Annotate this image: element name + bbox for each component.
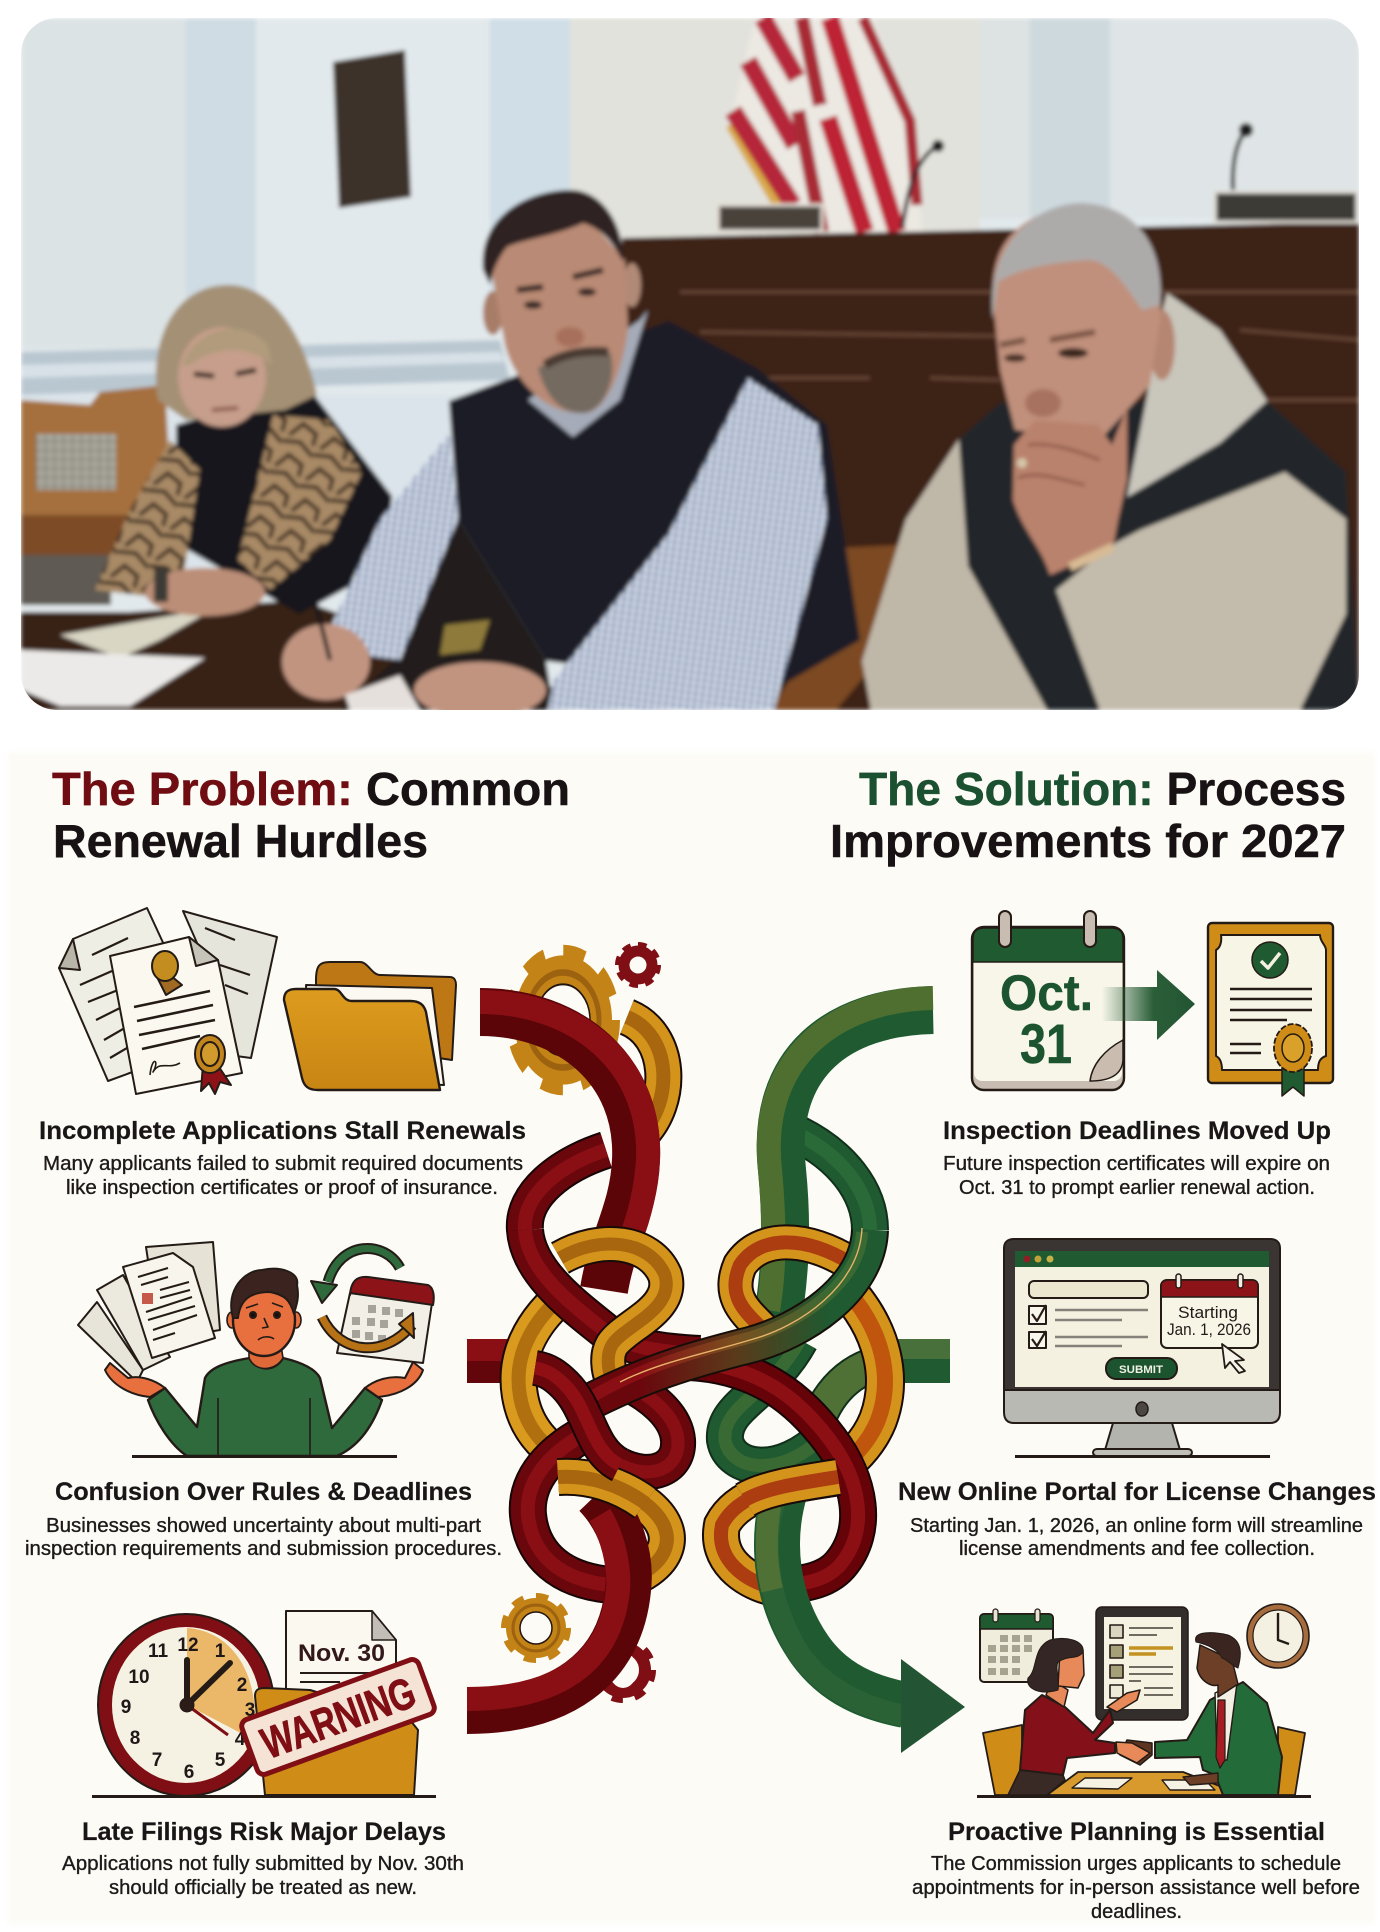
text: New Online Portal for License Changes: New Online Portal for License Changes: [898, 1478, 1376, 1506]
text: Inspection Deadlines Moved Up: Oct. 31 to prompt earlier renewal action.: [959, 1177, 1315, 1199]
icon: chairs: [983, 1725, 1305, 1795]
icon: clock: 3: [245, 1700, 255, 1721]
icon: calendar with arrows: [311, 1248, 434, 1363]
photo: chairs: [21, 385, 900, 710]
icon: clock: 5: [215, 1750, 226, 1771]
text: Proactive Planning is Essential: appointments for in-person assistance well before: [912, 1877, 1360, 1899]
photo: nameplates and microphones: [718, 123, 1357, 231]
text: Late Filings Risk Major Delays: should officially be treated as new.: [109, 1877, 417, 1899]
portal: submit button: [1106, 1358, 1177, 1379]
icon: clock: 10: [128, 1667, 150, 1688]
icon: clock: 12: [177, 1635, 199, 1656]
text: Incomplete Applications Stall Renewals: [39, 1117, 526, 1199]
icon: clock: 8: [130, 1728, 140, 1749]
photo: man on the right: [862, 203, 1359, 710]
icon: gears behind the knot: [505, 946, 657, 1699]
text: Proactive Planning is Essential: Proactive Planning is Essential: [948, 1818, 1325, 1846]
panel: problem 3, clock and warning icon: [92, 1611, 436, 1798]
text: Proactive Planning is Essential: deadlines.: [1091, 1901, 1182, 1923]
icon: clock: 4: [235, 1729, 246, 1750]
icon: man in green: [1155, 1633, 1282, 1795]
panel: solution 2, monitor with online portal: [1004, 1239, 1280, 1458]
text: Late Filings Risk Major Delays: [62, 1818, 464, 1899]
portal: cursor: [1222, 1344, 1245, 1373]
text: Late Filings Risk Major Delays: Late Filings Risk Major Delays: [82, 1818, 446, 1846]
icon: clock: 6: [184, 1762, 194, 1783]
title: The Solution: The Solution: Process: [859, 763, 1346, 815]
panel: solution 3, meeting and handshake icon: [977, 1604, 1311, 1798]
portal: Starting Jan. 1, 2026 card: Starting: [1178, 1303, 1238, 1322]
icon: Oct. 31 calendar: [972, 911, 1124, 1090]
text: Incomplete Applications Stall Renewals: Incomplete Applications Stall Renewals: [39, 1117, 526, 1145]
text: Confusion Over Rules and Deadlines: [25, 1478, 502, 1560]
icon: certificate: [110, 937, 242, 1094]
icon: Oct. 31 calendar: Oct.: [1000, 965, 1093, 1021]
icon: woman in red: [1008, 1638, 1140, 1795]
text: New Online Portal for License Changes: [898, 1478, 1376, 1560]
text: Confusion Over Rules and Deadlines: inspection requirements and submission procedures.: [25, 1538, 502, 1560]
photo: table with papers: [21, 600, 620, 710]
icon: tablet checklist: [1096, 1607, 1188, 1720]
icon: table: [1047, 1772, 1243, 1795]
icon: certificate with check: [1208, 923, 1333, 1096]
portal: Starting Jan. 1, 2026 card: Jan. 1, 2026: [1167, 1320, 1251, 1339]
icon: handshake: [1116, 1740, 1152, 1765]
photo: wall: [21, 18, 1360, 710]
icon: confused person: [105, 1269, 423, 1458]
icon: warning stamp: WARNING: [255, 1668, 422, 1769]
title: The Problem: [52, 763, 570, 867]
title: The Problem: The Problem: Common: [52, 763, 570, 815]
portal: submit button: SUBMIT: [1119, 1364, 1163, 1376]
icon: clock: 7: [152, 1750, 162, 1771]
text: New Online Portal for License Changes: license amendments and fee collection.: [959, 1538, 1315, 1560]
text: Inspection Deadlines Moved Up: Future inspection certificates will expire on: [943, 1153, 1330, 1175]
icon: Oct. 31 calendar: 31: [1020, 1012, 1072, 1075]
text: Incomplete Applications Stall Renewals: Many applicants failed to submit required documents: [43, 1153, 523, 1175]
portal: Starting Jan. 1, 2026 card: [1161, 1274, 1258, 1348]
photo: woman on the left: [95, 285, 392, 616]
icon: wall clock: [1247, 1604, 1309, 1668]
photo: three officials at a council table: [21, 18, 1360, 718]
text: Late Filings Risk Major Delays: Applications not fully submitted by Nov. 30th: [62, 1853, 464, 1875]
cream poster background: [8, 752, 1375, 1924]
icon: paper stack: [59, 908, 277, 1094]
text: Proactive Planning is Essential: [912, 1818, 1360, 1923]
text: Proactive Planning is Essential: The Commission urges applicants to schedule: [931, 1853, 1341, 1875]
icon: clock: [98, 1614, 274, 1796]
icon: papers: [78, 1242, 220, 1382]
text: Confusion Over Rules and Deadlines: Confusion Over Rules & Deadlines: [55, 1478, 472, 1506]
icon: clock: 9: [121, 1697, 131, 1718]
title: The Problem: Renewal Hurdles: [53, 815, 428, 867]
chart: tangled green and yellow ribbons (solution side): [535, 998, 965, 1753]
icon: gradient arrow: [1102, 970, 1195, 1040]
icon: folder: [255, 1688, 418, 1795]
portal: form fields: [1029, 1281, 1148, 1348]
icon: clock: 1: [215, 1641, 226, 1662]
panel: problem 1, documents and folder icon: [59, 908, 456, 1094]
icon: clock: 11: [148, 1641, 168, 1662]
panel: problem 2, confused person icon: [78, 1242, 434, 1458]
panel: solution 1, calendar and certificate icon: [972, 911, 1333, 1096]
chart: tangled red and yellow ribbons (problem side): [467, 1002, 700, 1711]
text: Inspection Deadlines Moved Up: Inspection Deadlines Moved Up: [943, 1117, 1331, 1145]
photo: wooden dais: [622, 222, 1359, 710]
icon: folder: [284, 962, 456, 1090]
text: Confusion Over Rules and Deadlines: Businesses showed uncertainty about multi-part: [46, 1515, 481, 1537]
icon: warning stamp: [240, 1658, 436, 1776]
text: Inspection Deadlines Moved Up: [943, 1117, 1331, 1199]
photo: man in the centre: [282, 190, 860, 718]
icon: wall calendar: [980, 1609, 1053, 1682]
title: The Solution: Improvements for 2027: [830, 815, 1346, 867]
photo: American flag: [730, 18, 922, 232]
icon: Nov. 30 document: Nov. 30: [298, 1640, 385, 1667]
text: New Online Portal for License Changes: Starting Jan. 1, 2026, an online form will streamline: [910, 1515, 1363, 1537]
title: The Solution: [830, 763, 1346, 867]
icon: Nov. 30 document: [286, 1611, 396, 1720]
icon: clock: 2: [237, 1675, 247, 1696]
photo: wall plaque: [333, 50, 411, 208]
text: Incomplete Applications Stall Renewals: like inspection certificates or proof of insurance.: [66, 1177, 498, 1199]
